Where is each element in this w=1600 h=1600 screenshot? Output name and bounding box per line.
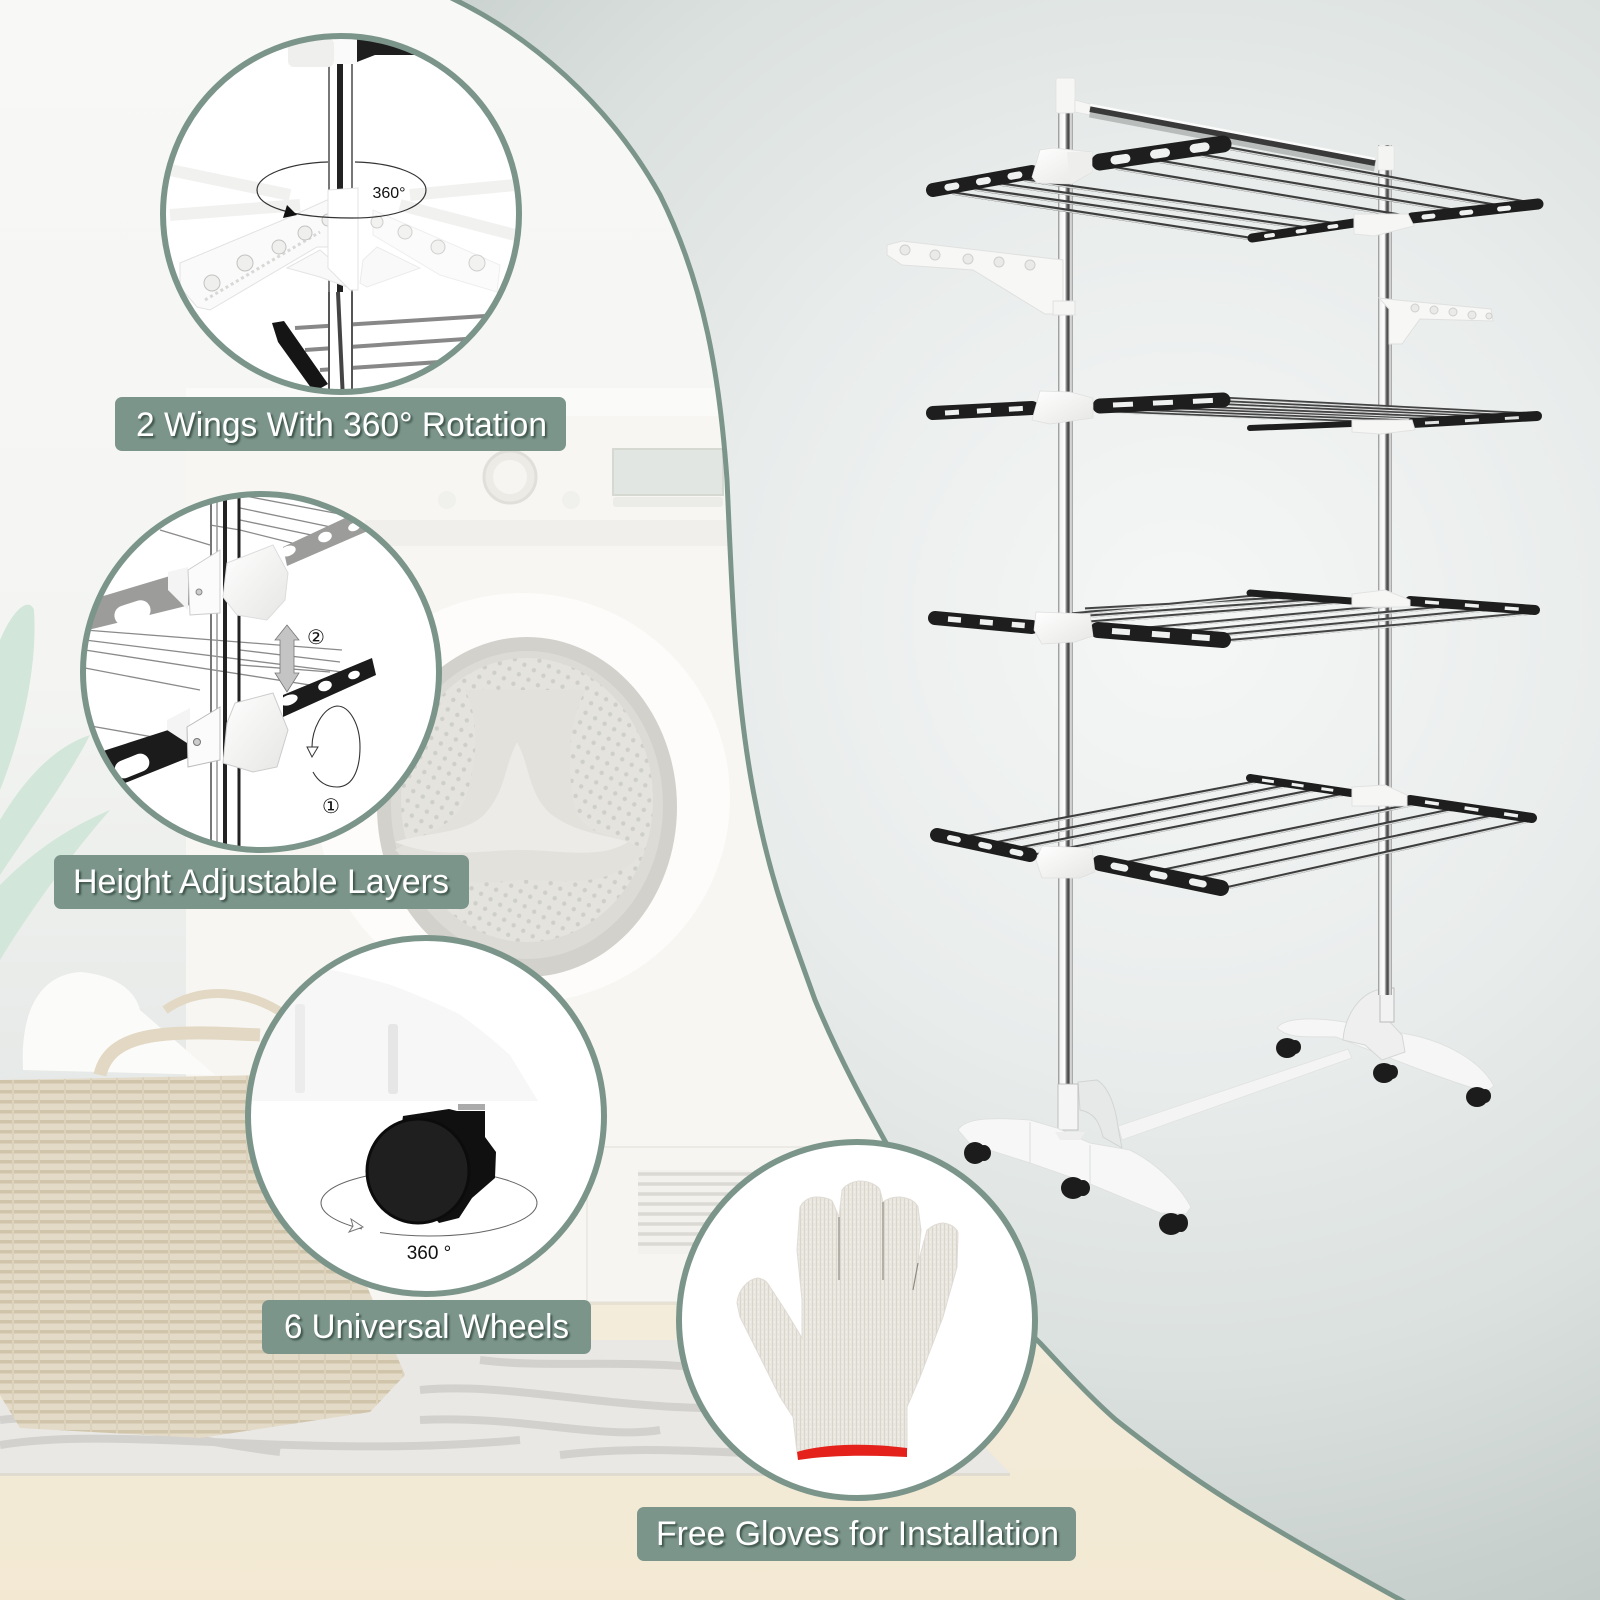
connecting bar: [1118, 1049, 1352, 1140]
rotation arc: [312, 706, 360, 787]
upper clamp: [168, 545, 288, 620]
rug: [0, 1340, 1010, 1476]
pole caps: [1056, 78, 1075, 113]
tier 3: [935, 590, 1535, 644]
label: height adjustable: [54, 855, 469, 909]
circle panel: height adjustable: ①: [322, 796, 340, 818]
label: free gloves: Free Gloves for Installation: [656, 1515, 1059, 1553]
plant: [0, 605, 110, 960]
lower rods: [295, 316, 485, 370]
washing machine: [186, 448, 882, 1305]
back base: [1276, 988, 1494, 1107]
floor: [0, 1305, 1500, 1600]
rotation arrow: [349, 1219, 363, 1232]
glove cuff: [797, 1445, 907, 1460]
curved divider line: [445, 0, 1410, 1600]
product: drying rack: [887, 78, 1538, 1235]
glove: [737, 1181, 958, 1460]
tier 1: [933, 144, 1538, 240]
tier 4: [937, 778, 1532, 889]
double arrow: [275, 625, 299, 692]
360 label: 360 °: [407, 1243, 451, 1264]
360 label: 360°: [372, 185, 406, 202]
laundry basket: [0, 972, 405, 1438]
tier 2: [933, 391, 1537, 434]
faded upper wings: [170, 170, 515, 235]
drum: [377, 637, 677, 977]
label: universal wheels: 6 Universal Wheels: [284, 1308, 569, 1346]
circle panel: height adjustable: [83, 490, 439, 860]
wing pins: [204, 214, 334, 291]
label: 2 wings: 2 Wings With 360° Rotation: [136, 406, 547, 444]
rods: [85, 495, 345, 740]
door ring: [316, 593, 730, 1003]
ellipse: [321, 1170, 537, 1236]
white lower brackets: [287, 250, 347, 287]
caster wheel: [395, 1109, 496, 1223]
right pole: [1378, 145, 1392, 995]
top bar: [1090, 105, 1375, 166]
circle panel: universal wheels: [245, 938, 604, 1294]
front base: [958, 1080, 1191, 1235]
black arm: [104, 730, 188, 783]
label: 2 wings: [115, 397, 566, 451]
lower clamp: [167, 693, 288, 772]
folded wing left: [887, 241, 1075, 315]
white base: [245, 970, 538, 1101]
label: universal wheels: [262, 1300, 591, 1354]
label: height adjustable: Height Adjustable Layers: [73, 863, 449, 901]
centre plate: [328, 188, 358, 290]
top hub: [288, 38, 334, 67]
pole: [328, 60, 353, 400]
circle panel: gloves: [679, 1142, 1035, 1498]
near wing: [180, 200, 334, 310]
far wing: [373, 210, 500, 292]
ghost arm: [91, 576, 189, 630]
left pole: [1058, 110, 1073, 1095]
lower panel and vent: [586, 1146, 806, 1302]
rotation ellipse: [257, 162, 426, 218]
folded wing right: [1379, 298, 1493, 344]
label: free gloves: [637, 1507, 1076, 1561]
arrow: [283, 205, 297, 218]
black lower arm: [272, 321, 328, 392]
poles: [210, 490, 212, 860]
circle panel: 360 degree wings: [163, 36, 519, 402]
step numbers: ②: [307, 627, 325, 649]
